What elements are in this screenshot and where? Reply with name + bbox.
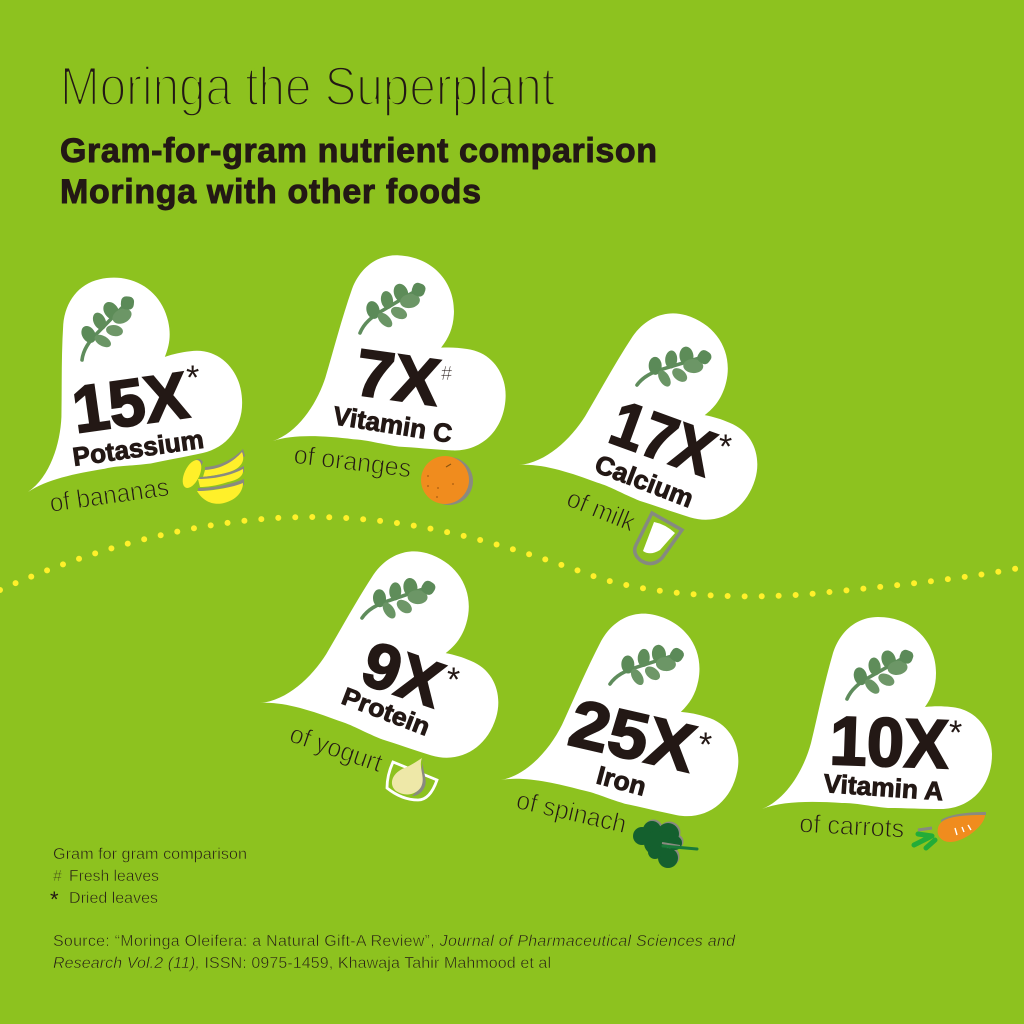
panel: vitamin A heart <box>762 617 992 848</box>
panel: potassium heart: 15X <box>68 357 193 447</box>
footnotes: Dried leaves <box>69 890 158 907</box>
panel: vitamin C heart <box>273 249 513 505</box>
panel: vitamin C heart: of oranges <box>292 439 413 483</box>
panel: vitamin A heart: * <box>949 714 962 752</box>
panel: potassium heart <box>0 254 252 518</box>
panel: vitamin A heart: Vitamin A <box>823 768 945 806</box>
title: Moringa the Superplant <box>60 55 555 117</box>
source: Source: “Moringa Oleifera: a Natural Gift-A Review”, Journal of Pharmaceutical Sciences and <box>53 933 736 950</box>
panel: calcium heart: Calcium <box>591 449 698 514</box>
subtitle: Moringa with other foods <box>60 173 481 211</box>
panel: protein heart <box>260 519 536 800</box>
panel: calcium heart: 17X <box>601 386 725 490</box>
panel: protein heart: Protein <box>338 682 434 742</box>
panel: vitamin C heart: # <box>441 363 453 385</box>
panel: calcium heart <box>519 281 795 564</box>
panel: vitamin C heart: 7X <box>351 335 445 420</box>
panel: protein heart: 9X <box>353 627 453 721</box>
panel: vitamin C heart: Vitamin C <box>331 400 454 449</box>
footnotes: * <box>50 887 59 912</box>
dotted yellow path <box>0 517 1024 596</box>
panel: vitamin A heart: 10X <box>828 702 950 783</box>
panel: calcium heart: of milk <box>563 483 641 538</box>
footnotes <box>50 846 247 912</box>
panel: vitamin A heart: of carrots <box>799 808 905 843</box>
panel: iron heart: 25X <box>563 686 703 787</box>
subtitle <box>60 132 657 211</box>
source <box>53 933 736 972</box>
icon: orange <box>421 456 473 505</box>
panel: iron heart: of spinach <box>514 785 630 839</box>
source: Research Vol.2 (11), ISSN: 0975-1459, Khawaja Tahir Mahmood et al <box>53 955 551 972</box>
footnotes: # <box>53 868 62 885</box>
panel: iron heart: Iron <box>593 760 650 802</box>
footnotes: Fresh leaves <box>69 868 159 885</box>
panel: potassium heart: of bananas <box>48 472 171 518</box>
footnotes: Gram for gram comparison <box>53 846 247 863</box>
panel: protein heart: of yogurt <box>286 718 387 778</box>
panel: potassium heart: * <box>186 359 199 397</box>
panel: calcium heart: * <box>719 428 732 466</box>
panel: iron heart <box>501 592 764 868</box>
subtitle: Gram-for-gram nutrient comparison <box>60 132 657 170</box>
panel: protein heart: * <box>447 661 460 699</box>
icon: milk glass <box>635 513 682 564</box>
icon: carrot <box>914 812 986 848</box>
icon: spinach leaf <box>633 820 697 868</box>
icon: bananas <box>179 449 245 504</box>
panel: potassium heart: Potassium <box>71 424 206 472</box>
icon: yogurt bowl <box>387 758 437 800</box>
panel: iron heart: * <box>699 726 712 764</box>
